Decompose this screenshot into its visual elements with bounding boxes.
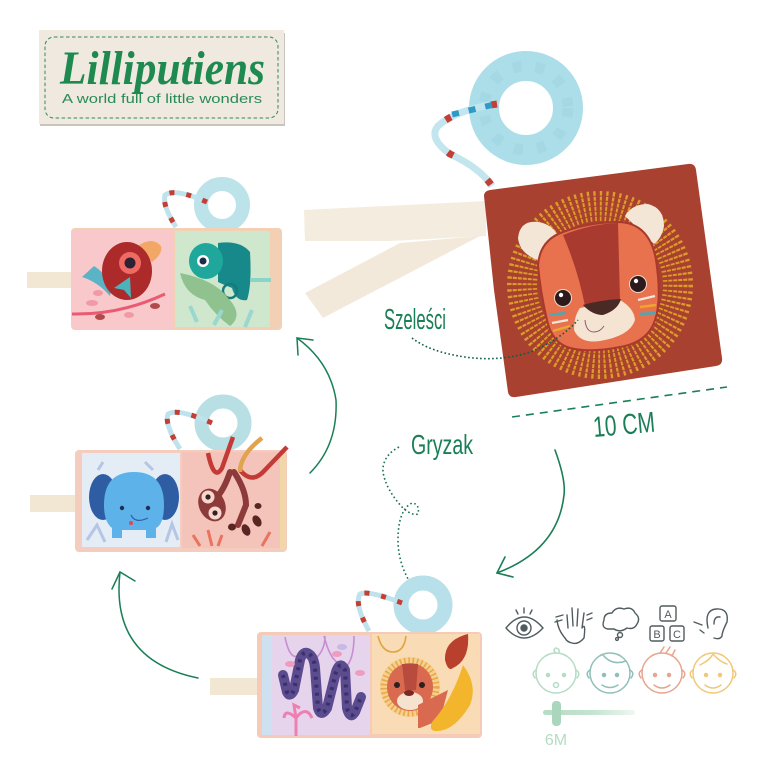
logo label [39,30,285,126]
arrow: first to second book [297,338,336,473]
teether [202,402,244,444]
ribbon [358,593,402,631]
icon: eye [506,608,543,638]
face: infant [533,648,579,693]
forehead stripe [563,223,620,306]
chameleon [180,242,271,327]
label: Szeleści: Szeleści [384,304,446,336]
label: 10 CM: 10 CM [592,407,656,444]
yellow felt leaf [431,665,473,731]
small book: elephant and monkey [30,402,287,552]
age slider [543,701,635,726]
face: baby [587,653,633,693]
book base [257,632,482,738]
left page [72,229,174,329]
sensory icons row [506,606,727,643]
upper strap [304,201,486,241]
smile [585,320,604,332]
book base [75,450,287,552]
right page [182,452,280,548]
plush square [484,164,722,397]
icon: alphabet blocks [650,606,684,641]
parrot [72,241,165,320]
arrow: third book to second book [112,572,198,678]
eyes [554,276,646,306]
dotted leader to teether [383,447,418,587]
muzzle [574,300,635,342]
pull tab [27,272,72,288]
icon: ear [694,609,727,639]
icon: alphabet blocks: A [664,609,672,621]
page ribbons [208,437,287,478]
age label: 6M: 6M [545,732,567,749]
icon: thought cloud [603,608,639,640]
monkey [193,472,270,546]
lion mane stitching [512,196,688,374]
whisker stripes [549,296,656,331]
teether ring [484,66,568,150]
left page [82,453,180,547]
pull tab [30,495,76,512]
teether [401,583,445,627]
logo tagline: A world full of little wonders [62,92,262,106]
face: toddler [639,647,685,693]
lower strap [305,236,480,318]
elephant [87,462,179,542]
red leaf [445,634,468,669]
nose [583,299,621,315]
small book: parrot and chameleon [27,184,282,330]
lion ears [518,204,664,262]
icon: alphabet blocks: B [653,629,661,641]
teether [201,184,243,226]
ribbon [164,193,207,227]
icon: touching hand [555,608,592,643]
hanging vine [378,636,406,652]
spine strip [280,452,286,550]
face: child [690,653,736,693]
ribbon [167,412,212,449]
book base [71,228,282,330]
lion face [538,222,659,350]
age faces row [533,647,736,693]
right page [175,231,270,327]
dimension line [512,387,727,417]
large lion book [304,66,722,397]
arrow: lion book to third book [497,450,564,577]
small book: snake and lion [210,583,482,738]
icon: alphabet blocks: C [673,629,681,641]
pull tab [210,678,258,695]
logo wordmark: Lilliputiens [59,42,265,95]
left page [272,635,370,735]
right page [372,634,480,734]
label: Gryzak: Gryzak [411,429,474,460]
small lion [380,657,448,728]
snake [283,636,365,736]
ribbon [435,104,497,186]
inner blue strip [262,635,272,735]
dotted leader to lion book [412,320,578,359]
